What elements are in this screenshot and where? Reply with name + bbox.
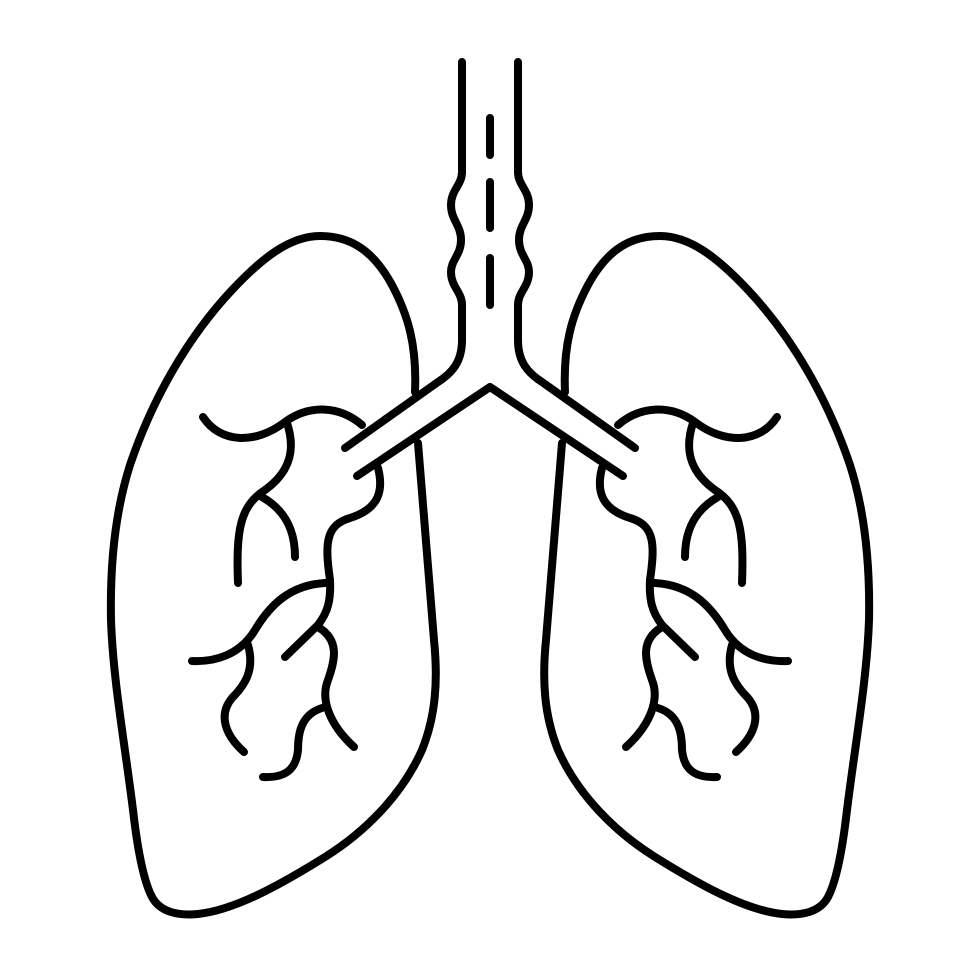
trachea centre dashes — [486, 118, 494, 305]
upper downward branch — [238, 423, 291, 583]
upper small branch — [262, 497, 295, 557]
lower central branch — [318, 627, 354, 747]
lower central twig — [263, 708, 322, 777]
upper branch — [203, 410, 362, 438]
left trachea wall and bronchus — [345, 62, 462, 448]
left lung outline — [111, 236, 436, 914]
left half: lung, airway and bronchial branches — [111, 62, 490, 914]
lower left branch — [192, 583, 325, 661]
right bronchus inner wall — [490, 387, 623, 476]
right branches — [600, 410, 788, 777]
left bronchus inner wall — [357, 387, 490, 476]
right trachea wall and bronchus — [518, 62, 635, 448]
lower left twig — [225, 645, 250, 752]
main descending branch — [285, 468, 380, 657]
right half: mirrored lung, airway and bronchial branches — [490, 62, 869, 914]
right lung outline — [544, 236, 869, 914]
